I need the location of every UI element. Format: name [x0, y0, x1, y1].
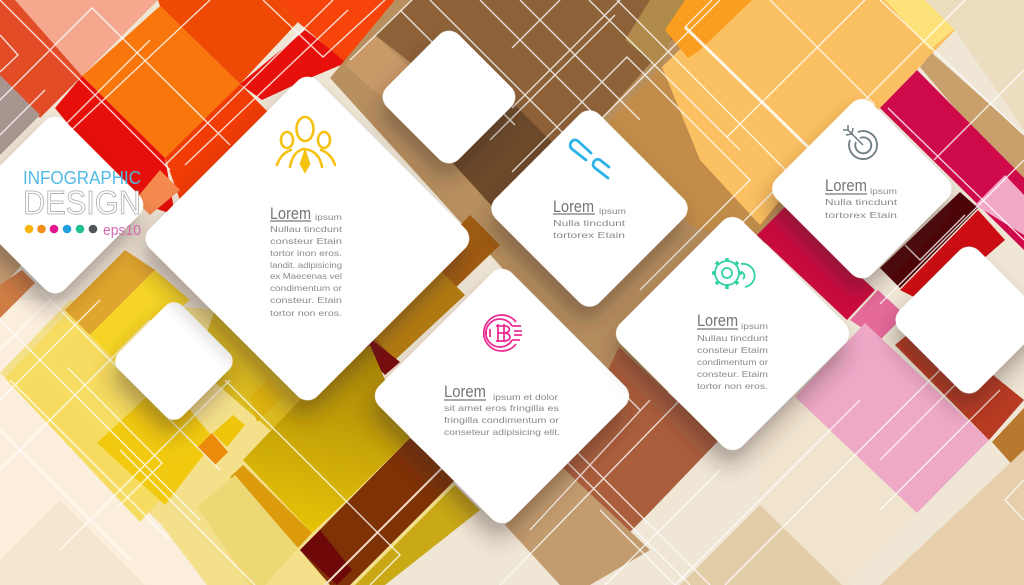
body text	[270, 212, 343, 318]
body text: ipsum	[870, 186, 897, 196]
body text: tortorex Etain	[825, 210, 897, 220]
colour dots	[25, 225, 97, 233]
body text: ipsum et dolor	[493, 392, 558, 402]
body text: fringilla condimentum or	[444, 415, 559, 425]
body text: sit amet eros fringilla es	[444, 403, 559, 413]
top-right orange and crimson blocks	[662, 0, 1024, 340]
icon: link	[570, 140, 609, 178]
body text: tortor inon eros.	[270, 248, 342, 258]
top-left red and orange blocks	[0, 0, 395, 215]
body text: consteur. Etaim	[697, 369, 768, 379]
icon: bitcoin	[484, 315, 522, 351]
body text: condimentum or	[270, 283, 342, 293]
body text: ipsum	[741, 321, 768, 331]
panel: target	[766, 93, 957, 284]
body text: ipsum	[315, 212, 342, 222]
body text: Nullau tincdunt	[697, 333, 769, 343]
panel: right blank tile	[890, 241, 1024, 399]
body text: tortor non eros.	[270, 308, 342, 318]
icon: people	[277, 117, 335, 171]
panel: team	[140, 71, 475, 406]
body text: Nulla tincdunt	[553, 218, 626, 228]
body text: Nullau tincdunt	[270, 224, 343, 234]
body text: condimentum or	[697, 357, 768, 367]
body text	[825, 186, 898, 220]
body text: ipsum	[599, 206, 626, 216]
body text: ex Maecenas vel	[270, 271, 342, 281]
body text: consteur Etaim	[697, 345, 768, 355]
lorem heading: Lorem	[697, 311, 738, 330]
lorem heading: Lorem	[444, 382, 486, 401]
body text: Nulla tincdunt	[825, 197, 898, 207]
body text: tortor non eros.	[697, 381, 768, 391]
panel: intro tile	[0, 111, 149, 299]
heading: design: DESIGN	[23, 184, 141, 221]
panel: small top tile	[377, 25, 521, 169]
panel: link	[486, 105, 693, 312]
body text	[697, 321, 769, 391]
lower-left yellow blocks	[0, 230, 480, 585]
panel: bitcoin	[369, 263, 635, 529]
lower-right pink and beige blocks	[680, 320, 1024, 585]
body text	[444, 392, 560, 437]
eps label: eps10	[103, 222, 141, 239]
panel: small left tile	[110, 297, 238, 425]
body text: conseteur adipisicing elit.	[444, 427, 560, 437]
panel: gears	[610, 211, 855, 456]
centre brown and tan blocks	[330, 0, 790, 585]
body text: landit. adipisicing	[270, 260, 342, 270]
lorem heading: Lorem	[825, 176, 867, 195]
lorem heading: Lorem	[553, 197, 594, 216]
body text: consteur Etain	[270, 236, 342, 246]
lorem heading: Lorem	[270, 204, 311, 223]
icon: target	[843, 125, 877, 159]
body text	[553, 206, 626, 240]
body text: tortorex Etain	[553, 230, 625, 240]
body text: consteur. Etain	[270, 295, 342, 305]
heading: infographic: INFOGRAPHIC	[23, 168, 141, 188]
icon: gears	[712, 258, 755, 289]
